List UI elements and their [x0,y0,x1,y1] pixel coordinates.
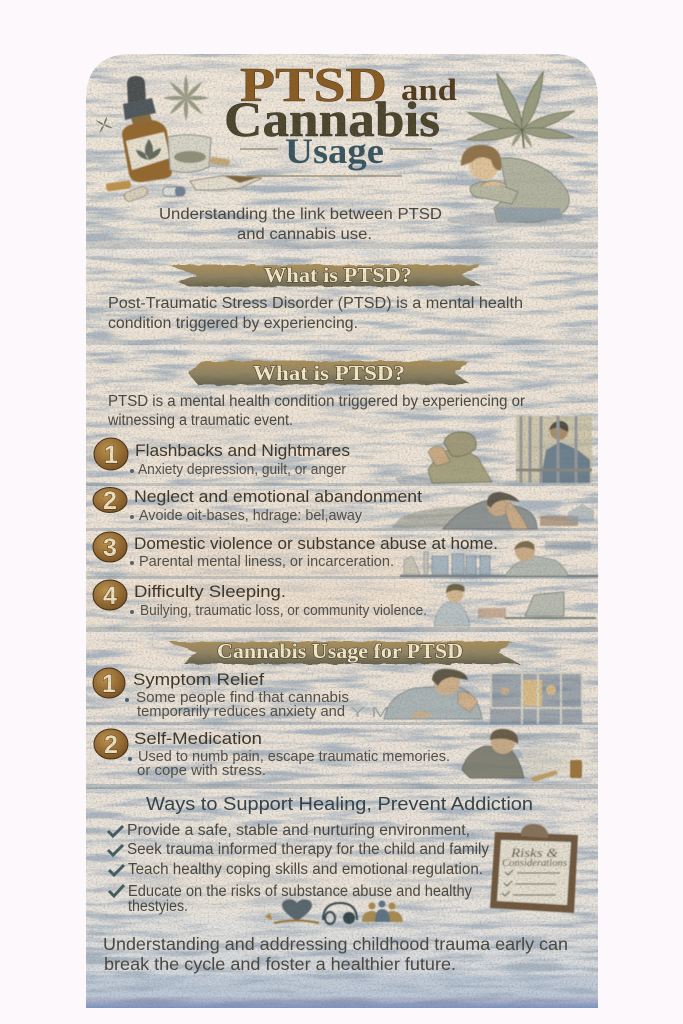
item 1: temporarily reduces anxiety and [137,704,345,720]
item 1: 1 [104,441,118,469]
icon: clipboard [490,824,578,913]
icon: star leaf [162,74,210,122]
definition text: Post-Traumatic Stress Disorder (PTSD) is a mental health [108,295,523,312]
item 3: Domestic violence or substance abuse at home. [134,534,498,553]
illustration: man with joint [384,669,482,719]
checklist: thestyies. [128,898,188,915]
checklist: Educate on the risks of substance abuse and healthy [128,883,472,900]
item 2: or cope with stress. [137,763,266,779]
item 3 [93,532,498,570]
banner [168,639,520,664]
illustration: soldier [395,432,500,484]
checklist: Seek trauma informed therapy for the child and family [127,841,489,858]
subtitle [159,206,442,243]
item 2: 2 [104,731,118,759]
title: Usage [285,131,384,171]
icons: heart, headphones, people [265,899,403,924]
icon: clipboard: Risks & [510,845,559,860]
intro text: PTSD is a mental health condition triggered by experiencing or [108,393,525,410]
item 4 [93,580,427,619]
closing statement: Understanding and addressing childhood trauma early can [103,934,568,954]
item 2: Used to numb pain, escape traumatic memories. [138,749,450,765]
section: what is PTSD second [93,361,598,626]
section: ways to support healing [103,793,578,974]
item 2: Neglect and emotional abandonment [134,487,422,506]
checklist: Provide a safe, stable and nurturing environment, [127,822,470,839]
item 2 [93,487,422,524]
icon: dropper bottle [122,76,172,182]
item 1: 1 [102,670,116,698]
icon: glass jar [168,135,230,172]
item 3: Parental mental liness, or incarceration. [139,554,394,570]
section: what is PTSD first [108,263,523,332]
banner: What is PTSD? [253,361,405,385]
checklist: Teach healthy coping skills and emotional regulation. [128,861,483,878]
subtitle: and cannabis use. [237,226,372,243]
heading: Ways to Support Healing, Prevent Addiction [146,793,533,814]
closing statement: break the cycle and foster a healthier future. [104,954,456,974]
banner: Cannabis Usage for PTSD [217,639,463,663]
intro text: witnessing a traumatic event. [107,412,293,429]
item 3: 3 [103,534,117,562]
item 1: Y MP [350,705,405,721]
background panel [86,54,598,1008]
item 4: Difficulty Sleeping. [134,582,286,601]
item 4: Builying, traumatic loss, or community violence. [140,603,427,619]
illustration: child and ruins [434,584,596,626]
icon: clipboard: Considerations [502,858,567,869]
header section [96,70,583,227]
item 4: 4 [103,582,117,610]
item 1 [93,668,405,721]
definition text [108,295,523,332]
definition text: condition triggered by experiencing. [108,315,358,332]
illustration: prison bars [516,416,592,483]
illustration: man holding head [462,729,582,782]
item 1: Some people find that cannabis [136,690,349,706]
banner [168,263,482,287]
icon: small leaf [96,116,113,133]
icon: crouching boy [447,145,583,227]
closing statement [103,934,568,974]
title: PTSD [240,57,387,112]
section: cannabis usage [93,639,582,782]
title: Cannabis [224,91,440,147]
item 2: Self-Medication [134,729,262,748]
item 2: 2 [103,487,117,515]
intro text [107,393,525,429]
item 1: Anxiety depression, guilt, or anger [138,462,346,478]
checklist [108,822,489,915]
item 1 [94,438,350,478]
illustration: bookshelf and person [400,541,598,576]
title: and [401,72,457,107]
banner [188,361,470,385]
illustration: window scene [490,672,582,724]
item 1: Flashbacks and Nightmares [135,441,350,460]
illustration: resting person [392,492,594,529]
item 2: Avoide oit-bases, hdrage: bel,away [139,508,363,524]
item 1: Symptom Relief [133,670,264,689]
subtitle: Understanding the link between PTSD [159,206,442,223]
title [224,57,457,176]
item 2 [94,729,450,779]
icon: cannabis leaf [466,70,576,148]
icon: capsules and papers [106,176,262,203]
banner: What is PTSD? [264,263,412,287]
